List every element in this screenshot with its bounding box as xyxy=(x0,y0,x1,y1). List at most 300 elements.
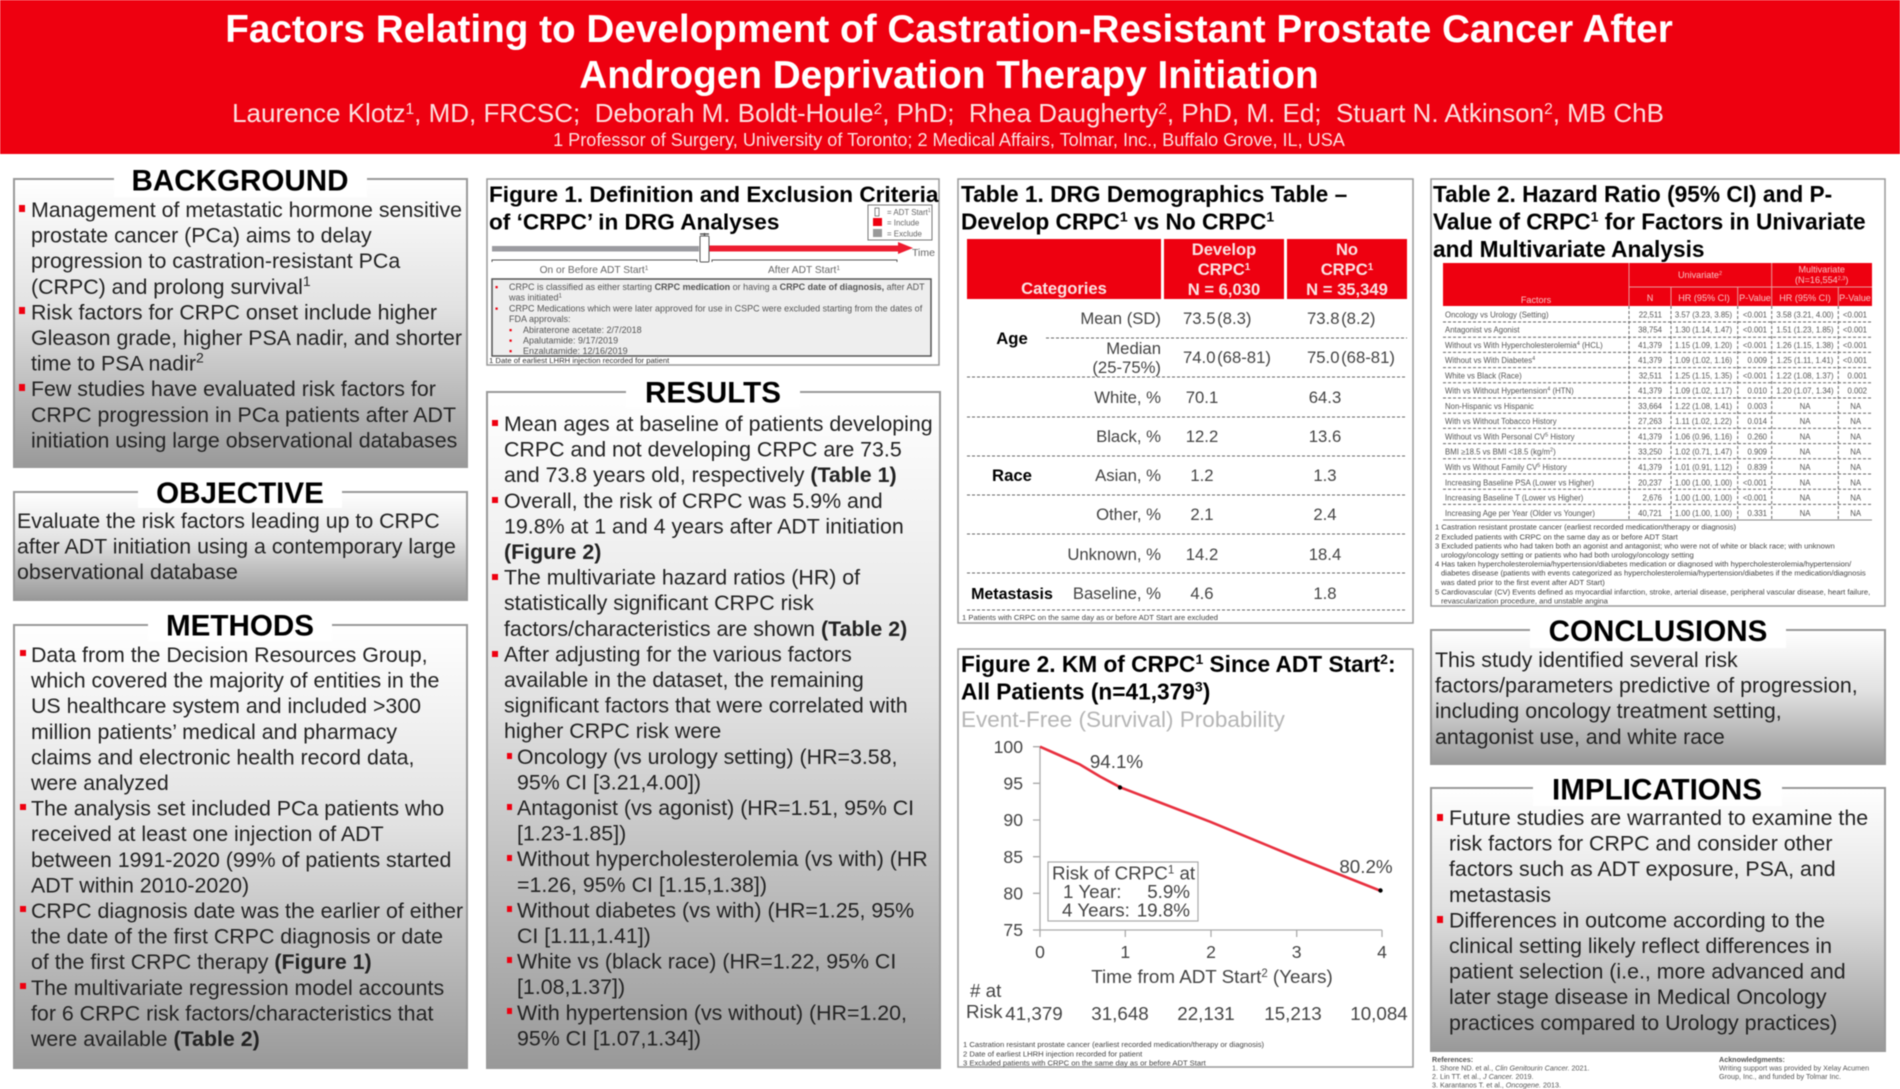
risk callout: Risk of CRPC1 at xyxy=(1052,862,1196,884)
table 1 rows: Asian, % xyxy=(1095,466,1161,485)
methods bullets: of the first CRPC therapy (Figure 1) xyxy=(31,950,372,974)
results bullets: CRPC and not developing CRPC are 73.5 xyxy=(504,438,902,462)
table 2 rows: 3.57 (3.23, 3.85) xyxy=(1675,310,1733,320)
risk callout: 4 Years: xyxy=(1062,900,1130,920)
patients at risk xyxy=(966,980,1408,1024)
table 2 header: N xyxy=(1647,293,1653,303)
results bullets: With hypertension (vs without) (HR=1.20, xyxy=(517,1001,907,1025)
table 1 header: Categories xyxy=(1021,279,1107,298)
footnotes: table 2: revascularization procedure, and unstable angina xyxy=(1441,596,1609,606)
heading: objective: OBJECTIVE xyxy=(156,477,324,510)
results bullets: Overall, the risk of CRPC was 5.9% and xyxy=(504,489,883,513)
table 2 rows: 1.00 (1.00, 1.00) xyxy=(1675,509,1733,518)
background bullets: Management of metastatic hormone sensitive xyxy=(31,198,462,222)
table 2 rows: 1.25 (1.15, 1.35) xyxy=(1675,371,1733,380)
table 2 rows: NA xyxy=(1800,432,1811,441)
table 2 rows: 1.11 (1.02, 1.22) xyxy=(1675,417,1732,426)
table 2 rows: Without vs With Hypercholesterolemia4 (HCL) xyxy=(1445,341,1603,350)
heading: table 1 xyxy=(961,181,1347,234)
footnotes: table 2: diabetes disease (patients with events categorized as hypercholesterolemia/hypertension/diabetes if the medication/diagnosis xyxy=(1441,568,1866,578)
table 1 header: N = 35,349 xyxy=(1306,280,1388,299)
results bullets: After adjusting for the various factors xyxy=(504,642,852,666)
results bullets: Without diabetes (vs with) (HR=1.25, 95% xyxy=(517,898,914,922)
implications bullets: Differences in outcome according to the xyxy=(1449,908,1825,932)
implications bullets: practices compared to Urology practices) xyxy=(1449,1011,1837,1035)
implications bullets: later stage disease in Medical Oncology xyxy=(1449,985,1827,1009)
table 1 rows: (25-75%) xyxy=(1092,358,1161,377)
table 2 header xyxy=(1443,263,1872,306)
definition box: CRPC Medications which were later approved for use in CSPC were excluded starting from the dates of xyxy=(509,303,923,313)
table 2 rows: 1.02 (0.71, 1.47) xyxy=(1675,448,1733,457)
table 2 rows: NA xyxy=(1800,463,1811,472)
conclusions text: antagonist use, and white race xyxy=(1435,725,1725,749)
results bullets: White vs (black race) (HR=1.22, 95% CI xyxy=(517,950,896,974)
table 2 rows: 1.25 (1.11, 1.41) xyxy=(1777,356,1834,365)
table 1 rows: 64.3 xyxy=(1309,388,1341,407)
table 2 rows: 0.010 xyxy=(1747,387,1768,396)
table 2 rows: NA xyxy=(1850,509,1862,518)
heading: figure 2 xyxy=(961,651,1396,704)
table 2 rows: 0.002 xyxy=(1847,387,1867,396)
table 1 rows: 75.0 (68-81) xyxy=(1307,348,1395,367)
table 2 header: P-Value xyxy=(1739,293,1771,303)
heading: table 2: Value of CRPC1 for Factors in Univariate xyxy=(1433,208,1866,234)
table 2 rows: With vs Without Family CV5 History xyxy=(1445,463,1567,472)
definition box: ▪ xyxy=(495,282,498,292)
panel: figure 2 xyxy=(958,649,1413,1068)
table 2 header: HR (95% CI) xyxy=(1779,293,1831,303)
heading: conclusions: CONCLUSIONS xyxy=(1549,615,1767,648)
references: 1. Shore ND. et al., Clin Genitourin Cancer. 2021. xyxy=(1432,1064,1590,1072)
methods bullets: claims and electronic health record data, xyxy=(31,745,414,769)
KM chart: 1 xyxy=(1120,942,1130,962)
table 2 rows: BMI ≥18.5 vs BMI <18.5 (kg/m2) xyxy=(1445,448,1556,457)
results bullets: [1.23-1.85]) xyxy=(517,822,626,846)
table 2 rows: 0.014 xyxy=(1747,417,1768,426)
table 1 rows xyxy=(967,309,1407,610)
methods bullets: the date of the first CRPC diagnosis or date xyxy=(31,925,443,949)
heading: table 1: Develop CRPC1 vs No CRPC1 xyxy=(961,208,1274,234)
table 2 rows: Increasing Baseline T (Lower vs Higher) xyxy=(1445,494,1584,502)
table 1 rows: 4.6 xyxy=(1190,584,1214,603)
table 1 header: Develop xyxy=(1192,240,1256,259)
results bullets: Oncology (vs urology setting) (HR=3.58, xyxy=(517,745,898,769)
table 2 rows: 41,379 xyxy=(1638,463,1662,472)
table 1 rows: 74.0 (68-81) xyxy=(1183,348,1271,367)
heading: figure 2: All Patients (n=41,3793) xyxy=(961,678,1210,704)
header banner xyxy=(0,0,1900,154)
heading: table 2: and Multivariate Analysis xyxy=(1433,236,1704,262)
table 2 rows: NA xyxy=(1850,432,1862,441)
definition box: ▪ xyxy=(495,303,498,313)
table 2 rows: 1.51 (1.23, 1.85) xyxy=(1776,326,1834,335)
table 2 rows: 1.00 (1.00, 1.00) xyxy=(1675,478,1733,488)
table 2 rows: 0.003 xyxy=(1747,402,1767,411)
methods bullets: for 6 CRPC risk factors/characteristics that xyxy=(31,1001,433,1025)
table 1 rows: 73.8 (8.2) xyxy=(1307,309,1375,328)
table 1 header: N = 6,030 xyxy=(1188,280,1260,299)
results bullets: available in the dataset, the remaining xyxy=(504,668,864,692)
legend xyxy=(868,205,932,240)
table 1 rows: 70.1 xyxy=(1186,388,1218,407)
results bullets xyxy=(492,412,933,1050)
results bullets: (Figure 2) xyxy=(504,540,601,564)
patients at risk: 10,084 xyxy=(1350,1003,1408,1024)
table 2 rows: 1.22 (1.08, 1.37) xyxy=(1776,371,1834,380)
table 2 rows: 0.909 xyxy=(1747,448,1767,457)
footnotes: table 2: 3 Excluded patients who had taken both an agonist and antagonist; who were not of white or black race; with unknown xyxy=(1435,542,1835,550)
footnotes: table 2: 1 Castration resistant prostate cancer (earliest recorded medication/therapy or diagnosis) xyxy=(1435,522,1737,532)
title: Factors Relating to Development of Castration-Resistant Prostate Cancer After xyxy=(225,8,1673,51)
table 2 rows: White vs Black (Race) xyxy=(1445,371,1522,380)
survival curve xyxy=(1040,747,1381,891)
background bullets: initiation using large observational databases xyxy=(31,428,457,452)
table 2 rows: Oncology vs Urology (Setting) xyxy=(1445,310,1549,320)
objective text: after ADT initiation using a contemporary large xyxy=(17,535,456,559)
table 1 rows: Unknown, % xyxy=(1067,545,1161,564)
KM chart: 4 xyxy=(1377,942,1387,962)
table 1 rows: Metastasis xyxy=(971,586,1053,603)
title: Androgen Deprivation Therapy Initiation xyxy=(579,54,1319,97)
timeline arrow: After ADT Start1 xyxy=(768,264,840,276)
methods bullets: million patients’ medical and pharmacy xyxy=(31,720,397,744)
heading: implications: IMPLICATIONS xyxy=(1552,774,1762,806)
panel: background xyxy=(14,164,467,467)
table 2 rows: 2,676 xyxy=(1642,494,1662,502)
methods bullets: between 1991-2020 (99% of patients started xyxy=(31,848,451,872)
results bullets: and 73.8 years old, respectively (Table 1) xyxy=(504,463,897,487)
table 2 rows: 1.22 (1.08, 1.41) xyxy=(1675,402,1733,411)
definition box: FDA approvals: xyxy=(509,314,571,324)
methods bullets: Data from the Decision Resources Group, xyxy=(31,643,428,667)
methods bullets: were analyzed xyxy=(30,771,169,795)
references xyxy=(1432,1055,1590,1089)
panel: methods xyxy=(14,610,467,1068)
table 1 rows: 1.2 xyxy=(1190,466,1214,485)
table 1 rows: Baseline, % xyxy=(1073,584,1161,603)
KM chart: 75 xyxy=(1003,920,1023,940)
table 2 rows: NA xyxy=(1850,448,1862,457)
timeline arrow: Time xyxy=(912,247,935,259)
heading: table 2 xyxy=(1433,181,1866,262)
table 2 rows: 0.839 xyxy=(1747,463,1767,472)
conclusions text: This study identified several risk xyxy=(1435,648,1738,672)
objective text: observational database xyxy=(17,560,238,584)
footnotes: table 2 xyxy=(1435,522,1870,606)
table 2 rows: NA xyxy=(1850,478,1862,488)
methods bullets: US healthcare system and included >300 xyxy=(31,694,421,718)
table 2 rows: NA xyxy=(1850,402,1862,411)
table 1 rows: Median xyxy=(1106,339,1161,358)
panel: objective xyxy=(14,477,467,600)
acknowledgments: Writing support was provided by Xelay Acumen xyxy=(1719,1064,1869,1072)
acknowledgments xyxy=(1719,1055,1869,1081)
legend: = Include xyxy=(887,218,920,228)
table 2 rows: NA xyxy=(1800,417,1811,426)
panel: conclusions xyxy=(1431,615,1885,764)
legend: = ADT Start1 xyxy=(887,208,931,217)
risk callout: 5.9% xyxy=(1147,881,1190,902)
table 2 rows: NA xyxy=(1850,417,1862,426)
table 2 rows: <0.001 xyxy=(1743,494,1767,502)
results bullets: CI [1.11,1.41]) xyxy=(517,924,651,948)
table 2 header: (N=16,5542,3) xyxy=(1795,275,1848,285)
KM chart: 2 xyxy=(1206,942,1216,962)
heading: figure 2: Figure 2. KM of CRPC1 Since ADT Start2: xyxy=(961,651,1396,677)
table 2 rows: <0.001 xyxy=(1743,310,1767,320)
table 2 rows: <0.001 xyxy=(1843,341,1867,350)
methods bullets: which covered the majority of entities in the xyxy=(30,669,439,693)
table 2 rows: 1.00 (1.00, 1.00) xyxy=(1675,494,1733,502)
definition box: CRPC is classified as either starting CRPC medication or having a CRPC date of diagnosis, after ADT xyxy=(509,282,925,292)
footnotes: table 2: 2 Excluded patients with CRPC on the same day as or before ADT Start xyxy=(1435,532,1679,542)
table 2 header: Factors xyxy=(1521,295,1552,305)
definition box: was initiated1 xyxy=(508,293,563,303)
conclusions text: including oncology treatment setting, xyxy=(1435,699,1782,723)
table 2 rows: 33,664 xyxy=(1638,402,1663,411)
table 2 rows: 41,379 xyxy=(1638,387,1662,396)
table 2 rows: NA xyxy=(1800,402,1811,411)
table 2 header: HR (95% CI) xyxy=(1678,293,1730,303)
table 2 rows: 22,511 xyxy=(1639,310,1662,320)
table 2 rows: NA xyxy=(1800,478,1811,488)
table 1 rows: Black, % xyxy=(1096,427,1161,446)
definition box: ▪ xyxy=(509,346,512,356)
table 1 rows: 73.5 (8.3) xyxy=(1183,309,1251,328)
table 1 rows: Race xyxy=(992,466,1032,485)
implications bullets: patient selection (i.e., more advanced and xyxy=(1449,960,1846,984)
results bullets: Without hypercholesterolemia (vs with) (HR xyxy=(517,847,928,871)
table 2 rows: 1.06 (0.96, 1.16) xyxy=(1675,432,1733,441)
KM chart: 80 xyxy=(1003,884,1023,904)
table 2 rows: Without vs With Personal CV5 History xyxy=(1445,432,1575,441)
background bullets: Risk factors for CRPC onset include higher xyxy=(31,300,437,324)
methods bullets: received at least one injection of ADT xyxy=(31,822,384,846)
table 2 rows: <0.001 xyxy=(1743,341,1767,350)
table 2 rows: Increasing Age per Year (Older vs Younger) xyxy=(1445,509,1595,518)
background bullets: CRPC progression in PCa patients after ADT xyxy=(31,403,456,427)
acknowledgments: Group, Inc., and funded by Tolmar Inc. xyxy=(1719,1072,1841,1081)
risk callout xyxy=(1048,862,1198,921)
definition box: ▪ xyxy=(509,336,512,346)
heading: figure 1: of ‘CRPC’ in DRG Analyses xyxy=(489,210,779,234)
patients at risk: 31,648 xyxy=(1091,1003,1149,1024)
footnotes: figure 2 xyxy=(963,1040,1265,1068)
table 2 header: P-Value xyxy=(1839,293,1871,303)
results bullets: factors/characteristics are shown (Table 2) xyxy=(504,617,907,641)
KM chart: 0 xyxy=(1035,942,1045,962)
table 2 rows: 1.01 (0.91, 1.12) xyxy=(1675,463,1733,472)
table 2 rows: <0.001 xyxy=(1843,356,1867,365)
table 2 rows xyxy=(1443,306,1872,520)
conclusions text xyxy=(1435,648,1858,749)
heading: figure 1: Figure 1. Definition and Exclusion Criteria xyxy=(489,182,939,207)
legend: = Exclude xyxy=(887,230,922,238)
definition box: Apalutamide: 9/17/2019 xyxy=(523,336,618,346)
KM chart: 95 xyxy=(1003,774,1023,794)
affiliations: 1 Professor of Surgery, University of Toronto; 2 Medical Affairs, Tolmar, Inc., Buffalo Grove, IL, USA xyxy=(553,130,1346,150)
table 2 rows: Increasing Baseline PSA (Lower vs Higher) xyxy=(1445,478,1594,488)
table 2 rows: Non-Hispanic vs Hispanic xyxy=(1445,402,1534,411)
footnotes: table 2: 4 Has taken hypercholesterolemia/hypertension/diabetes medication or diagnosed with hypercholesterolemia/hypertension/ xyxy=(1435,560,1852,568)
KM chart: 100 xyxy=(994,737,1023,757)
results bullets: higher CRPC risk were xyxy=(504,719,721,743)
implications bullets: factors such as ADT exposure, PSA, and xyxy=(1449,857,1836,881)
table 2 rows: 1.09 (1.02, 1.17) xyxy=(1675,387,1733,396)
results bullets: 19.8% at 1 and 4 years after ADT initiation xyxy=(504,514,904,538)
results bullets: [1.08,1.37]) xyxy=(517,975,625,999)
table 1 rows: Mean (SD) xyxy=(1080,309,1161,328)
footnotes: table 2: 5 Cardiovascular (CV) Events defined as myocardial infarction, stroke, arterial disease, peripheral vascular disease, heart failure, xyxy=(1435,588,1870,596)
table 1 rows: 12.2 xyxy=(1186,427,1218,446)
table 2 header: Univariate2 xyxy=(1678,270,1722,280)
table 1 rows: 1.8 xyxy=(1313,584,1337,603)
results bullets: statistically significant CRPC risk xyxy=(504,591,814,615)
table 2 rows: 40,721 xyxy=(1638,509,1662,518)
table 2 rows: NA xyxy=(1800,448,1811,457)
heading: methods: METHODS xyxy=(166,610,314,642)
patients at risk: Risk xyxy=(966,1001,1003,1022)
table 1 header: No xyxy=(1336,240,1358,259)
table 1 header: CRPC1 xyxy=(1198,260,1251,279)
background bullets: time to PSA nadir2 xyxy=(31,350,204,376)
results bullets: Mean ages at baseline of patients developing xyxy=(504,412,933,436)
table 2 rows: <0.001 xyxy=(1743,326,1767,335)
patients at risk: 15,213 xyxy=(1264,1003,1322,1024)
footnotes: figure 2: 2 Date of earliest LHRH injection recorded for patient xyxy=(963,1050,1143,1058)
table 2 rows: 38,754 xyxy=(1638,326,1663,335)
methods bullets: ADT within 2010-2020) xyxy=(31,873,249,897)
panel: table 1 xyxy=(958,179,1413,623)
methods bullets: CRPC diagnosis date was the earlier of either xyxy=(31,899,463,923)
results bullets: 95% CI [3.21,4.00]) xyxy=(517,770,701,794)
risk callout: 19.8% xyxy=(1137,900,1190,920)
patients at risk: 22,131 xyxy=(1177,1003,1235,1024)
background bullets xyxy=(19,198,462,452)
heading: figure 1 xyxy=(489,182,939,234)
definition box: ▪ xyxy=(509,325,512,335)
table 2 header: Multivariate xyxy=(1798,264,1845,274)
table 1 header xyxy=(967,239,1407,299)
background bullets: Few studies have evaluated risk factors for xyxy=(31,377,436,401)
table 2 rows: 0.001 xyxy=(1847,371,1867,380)
table 1 rows: 14.2 xyxy=(1186,545,1218,564)
results bullets: The multivariate hazard ratios (HR) of xyxy=(504,566,860,590)
footnotes: table 2: was dated prior to the first event after ADT Start) xyxy=(1440,578,1605,587)
table 2 rows: 0.260 xyxy=(1747,432,1768,441)
KM chart: 85 xyxy=(1003,847,1023,867)
results bullets: =1.26, 95% CI [1.15,1.38]) xyxy=(517,873,767,897)
table 2 rows: 1.26 (1.15, 1.38) xyxy=(1776,341,1834,350)
table 1 rows: 13.6 xyxy=(1309,427,1341,446)
table 2 rows: NA xyxy=(1800,494,1811,502)
patients at risk: 41,379 xyxy=(1005,1003,1063,1024)
table 2 rows: Without vs With Diabetes4 xyxy=(1445,356,1535,365)
definition box xyxy=(492,279,931,356)
table 2 rows: 41,379 xyxy=(1638,341,1662,350)
references: References: xyxy=(1432,1055,1473,1064)
panel: table 2 xyxy=(1431,179,1885,606)
KM chart: 90 xyxy=(1003,810,1023,830)
heading: background: BACKGROUND xyxy=(131,164,349,198)
table 2 rows: 33,250 xyxy=(1638,448,1663,457)
table 2 rows: 1.09 (1.02, 1.16) xyxy=(1675,356,1733,365)
table 2 rows: NA xyxy=(1850,463,1862,472)
table 2 rows: <0.001 xyxy=(1743,371,1767,380)
definition box: Abiraterone acetate: 2/7/2018 xyxy=(523,325,642,335)
background bullets: (CRPC) and prolong survival1 xyxy=(31,273,311,299)
conclusions text: factors/parameters predictive of progression, xyxy=(1435,674,1858,698)
table 2 rows: With vs Without Hypertension4 (HTN) xyxy=(1445,387,1574,396)
table 2 rows: 20,237 xyxy=(1638,478,1662,488)
objective text xyxy=(17,509,456,584)
table 2 rows: 0.009 xyxy=(1747,356,1767,365)
methods bullets: The analysis set included PCa patients who xyxy=(31,797,444,821)
panel: results xyxy=(487,376,940,1068)
implications bullets xyxy=(1437,806,1868,1035)
acknowledgments: Acknowledgments: xyxy=(1719,1055,1785,1064)
table 1 rows: White, % xyxy=(1094,388,1161,407)
table 1 rows: 2.1 xyxy=(1190,505,1214,524)
table 2 rows: NA xyxy=(1800,509,1811,518)
table 2 rows: Antagonist vs Agonist xyxy=(1445,326,1520,335)
table 2 rows: With vs Without Tobacco History xyxy=(1445,417,1557,426)
heading: table 2: Table 2. Hazard Ratio (95% CI) and P- xyxy=(1433,181,1832,207)
table 1 rows: Age xyxy=(996,329,1028,348)
heading: results: RESULTS xyxy=(645,376,781,410)
references: 2. Lin TT. et al., J Cancer. 2019. xyxy=(1432,1072,1534,1081)
methods bullets: The multivariate regression model accounts xyxy=(31,976,444,1000)
table 2 rows: 27,263 xyxy=(1638,417,1662,426)
footnotes: figure 2: 3 Excluded patients with CRPC on the same day as or before ADT Start xyxy=(963,1058,1207,1068)
KM chart: 80.2% xyxy=(1339,856,1393,877)
background bullets: Gleason grade, higher PSA nadir, and shorter xyxy=(31,326,462,350)
table 2 rows: 41,379 xyxy=(1638,356,1662,365)
panel: implications xyxy=(1431,774,1885,1051)
footnotes: table 2: urology/oncology setting or patients who had both urology/oncology setting xyxy=(1441,550,1694,560)
table 2 rows: <0.001 xyxy=(1743,478,1767,488)
table 2 rows: NA xyxy=(1850,494,1862,502)
patients at risk: # at xyxy=(970,980,1002,1001)
timeline arrow: On or Before ADT Start1 xyxy=(540,264,649,276)
KM chart xyxy=(994,737,1393,987)
table 1 rows: 2.4 xyxy=(1313,505,1337,524)
panel: figure 1 xyxy=(487,179,939,365)
definition box: Enzalutamide: 12/16/2019 xyxy=(523,346,628,356)
implications bullets: clinical setting likely reflect differences in xyxy=(1449,934,1832,958)
table 2 rows: 1.20 (1.07, 1.34) xyxy=(1776,387,1834,396)
methods bullets xyxy=(20,643,463,1051)
results bullets: Antagonist (vs agonist) (HR=1.51, 95% CI xyxy=(517,796,914,820)
KM chart: Time from ADT Start2 (Years) xyxy=(1091,966,1333,987)
table 1 rows: 18.4 xyxy=(1309,545,1341,564)
KM chart: 3 xyxy=(1292,942,1302,962)
KM chart: 94.1% xyxy=(1090,751,1143,772)
table 1 rows: Other, % xyxy=(1096,505,1161,524)
footnotes: figure 2: 1 Castration resistant prostate cancer (earliest recorded medication/therapy or diagnosis) xyxy=(963,1040,1265,1049)
methods bullets: were available (Table 2) xyxy=(30,1027,260,1051)
implications bullets: metastasis xyxy=(1449,883,1551,907)
objective text: Evaluate the risk factors leading up to CRPC xyxy=(17,509,440,533)
table 2 rows: 3.58 (3.21, 4.00) xyxy=(1776,310,1834,320)
table 2 rows: 1.30 (1.14, 1.47) xyxy=(1675,326,1733,335)
background bullets: prostate cancer (PCa) aims to delay xyxy=(31,224,372,248)
chart subtitle: Event-Free (Survival) Probability xyxy=(961,707,1286,732)
table 2 rows: <0.001 xyxy=(1843,310,1867,320)
results bullets: significant factors that were correlated with xyxy=(504,694,908,718)
table 2 rows: <0.001 xyxy=(1843,326,1867,335)
implications bullets: Future studies are warranted to examine the xyxy=(1449,806,1868,830)
